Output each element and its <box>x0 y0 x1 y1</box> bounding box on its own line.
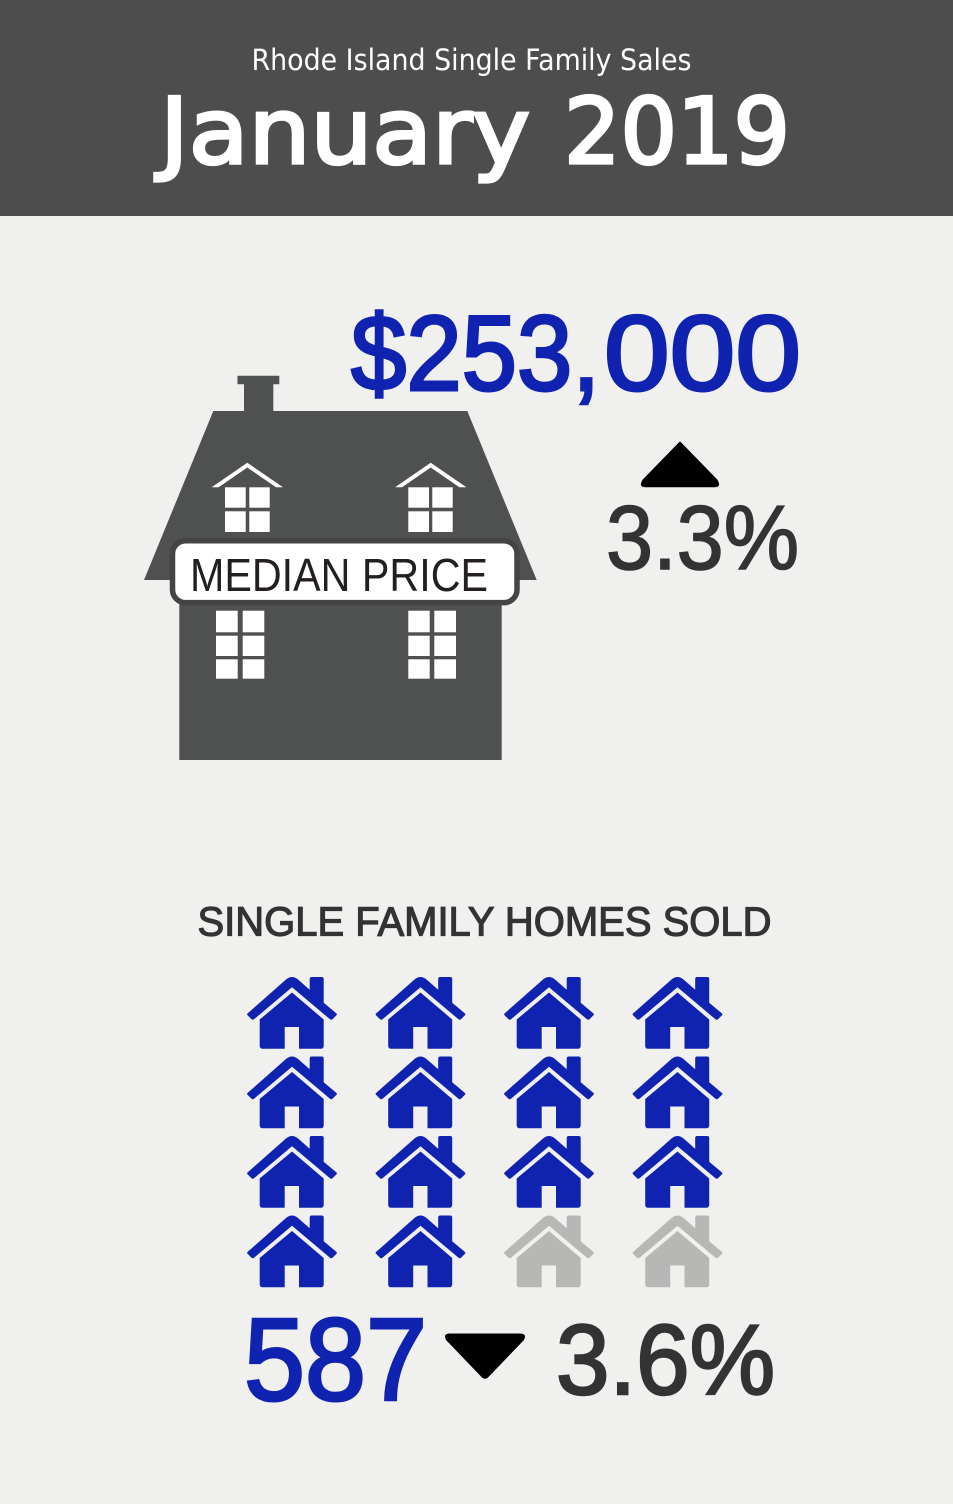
pictogram: homes sold <box>247 977 722 1287</box>
icon: down arrow <box>445 1334 525 1379</box>
attic window left <box>212 463 283 532</box>
header band <box>0 0 953 216</box>
title: 2019 <box>564 80 790 185</box>
icon: up arrow <box>641 442 719 487</box>
title <box>155 80 790 185</box>
median price value: 000 <box>604 293 801 413</box>
lower window right <box>408 611 456 679</box>
title: January <box>155 80 530 185</box>
median price value: $253, <box>351 293 600 413</box>
homes sold change: 3.6% <box>556 1304 775 1415</box>
subtitle: Rhode Island Single Family Sales <box>252 43 692 77</box>
lower window left <box>216 611 264 679</box>
attic window right <box>395 463 466 532</box>
median price label: MEDIAN PRICE <box>190 549 488 601</box>
homes sold heading: SINGLE FAMILY HOMES SOLD <box>198 898 772 944</box>
median price value <box>351 293 801 413</box>
median price change: 3.3% <box>606 488 799 589</box>
icon: large house with median price label <box>144 376 537 760</box>
homes sold value: 587 <box>244 1294 427 1425</box>
